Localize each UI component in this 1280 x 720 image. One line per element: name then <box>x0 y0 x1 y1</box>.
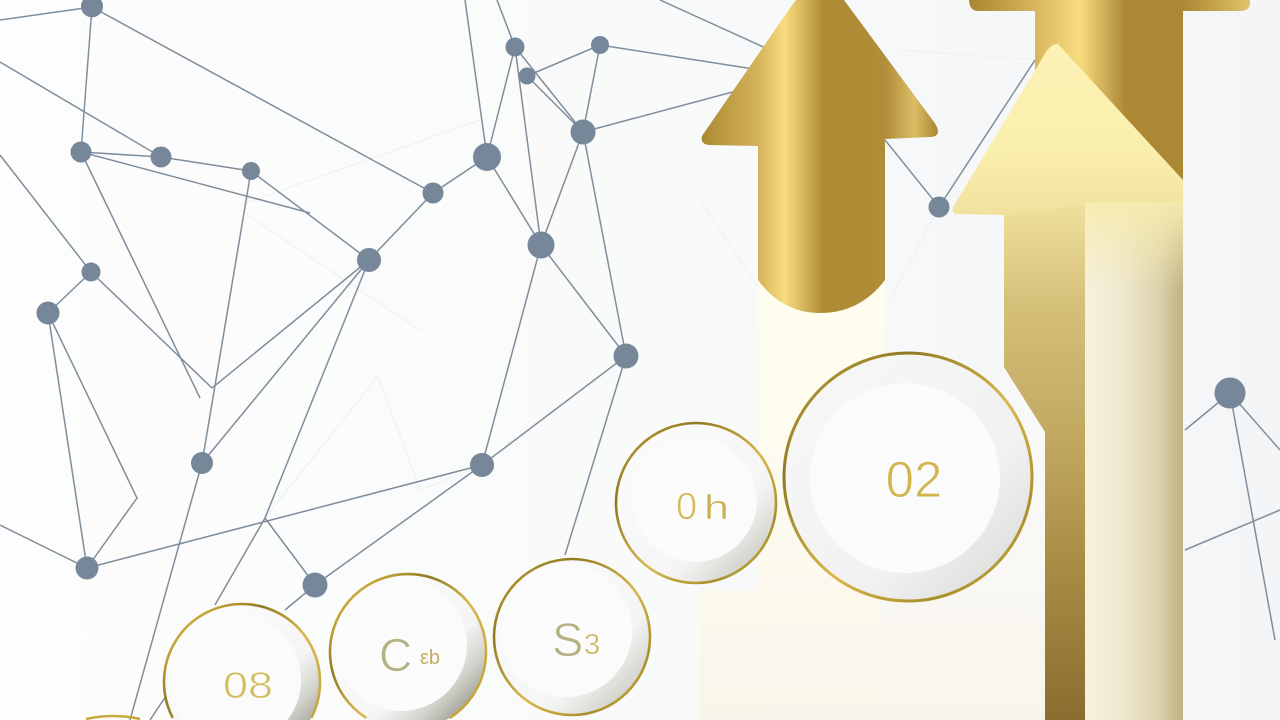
faint background lines <box>240 50 1035 518</box>
network nodes <box>36 0 1246 598</box>
badge 01: 0 <box>676 486 697 528</box>
badge S3 <box>494 559 650 715</box>
arrow: back gold <box>969 0 1250 180</box>
badge 02: 02 <box>886 451 942 508</box>
badge C <box>330 574 486 720</box>
cream glow column <box>700 280 885 720</box>
badge S3: S <box>552 613 583 666</box>
badge 08 <box>164 604 320 720</box>
badge 01: h <box>704 489 729 527</box>
badge S3: 3 <box>584 629 600 661</box>
white halo and cream base <box>880 364 1045 720</box>
badge C: C <box>379 629 412 681</box>
partial badge <box>86 716 140 719</box>
badge 01 <box>616 423 776 583</box>
arrow: front pale gold <box>953 44 1183 720</box>
badge 08: 08 <box>223 665 273 706</box>
arrow: left gold <box>702 0 938 313</box>
badge C: εb <box>420 647 440 669</box>
badge 02 <box>784 353 1032 601</box>
